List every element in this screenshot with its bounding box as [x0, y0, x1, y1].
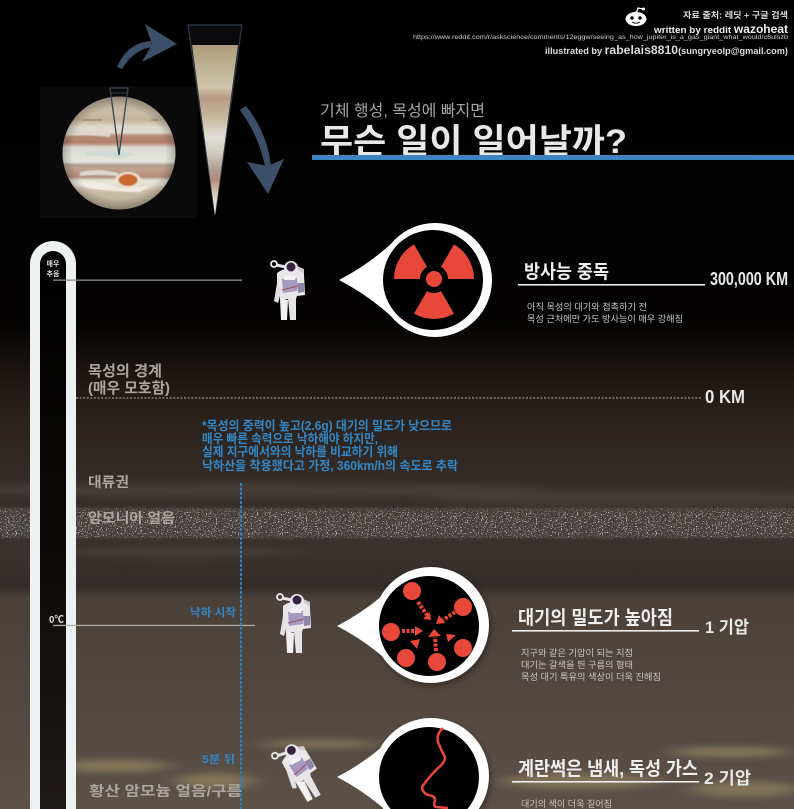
text: smell description: 대기의 색이 더욱 짙어짐 [521, 798, 612, 809]
author line: written by reddit wazoheat [653, 24, 788, 36]
layer labels: (매우 모호함) [88, 380, 170, 397]
heading: density rises: 대기의 밀도가 높아짐 [518, 607, 673, 629]
icon: compressing particles [382, 582, 472, 671]
blue note [202, 418, 458, 473]
pressure: 1 atm: 1 기압 [705, 618, 749, 637]
level line: 300,000 km [53, 280, 242, 281]
credits [413, 8, 788, 57]
astronaut 2 [277, 594, 311, 653]
astronaut 1 [271, 261, 305, 320]
arrow: wedge downward [240, 106, 284, 194]
jupiter photo panel [40, 86, 197, 218]
blue note: 낙하산을 착용했다고 가정, 360km/h의 속도로 추락 [202, 458, 458, 473]
source url: https://www.reddit.com/r/askscience/comments/12eggw/seeing_as_how_jupiter_is_a_gas_giant_what_would/c6ulszb [413, 34, 788, 41]
main title: 무슨 일이 일어날까? [320, 123, 627, 161]
subtitle: 기체 행성, 목성에 빠지면 [320, 102, 485, 120]
bubble: smell [337, 718, 491, 809]
label: ammonia ice: 암모니아 얼음 [88, 510, 175, 526]
jupiter atmosphere wedge [188, 25, 242, 215]
blue note: 매우 빠른 속력으로 낙하해야 하지만, [202, 431, 378, 446]
heading: rotten egg smell: 계란썩은 냄새, 독성 가스 [518, 758, 698, 780]
title underline [312, 155, 794, 160]
distance: 0 km: 0 KM [705, 387, 745, 407]
icon: reddit alien [626, 8, 646, 26]
label: boundary: 목성의 경계 [88, 363, 162, 380]
text: radiation description: 아직 목성의 대기와 접촉하기 전 [527, 301, 647, 312]
source line: 자료 출처: 레딧 + 구글 검색 [683, 10, 788, 20]
level line: 0 km boundary [76, 397, 702, 399]
zero celsius label: 0℃ [49, 615, 64, 626]
title [312, 102, 794, 161]
icon: radiation [394, 244, 474, 319]
label: five minutes later: 5분 뒤 [202, 753, 235, 766]
descent dotted line [240, 483, 242, 809]
layer labels [88, 363, 242, 799]
icon: face profile [422, 728, 448, 808]
blue note: *목성의 중력이 높고(2.6g) 대기의 밀도가 낮으므로 [202, 418, 452, 433]
pressure: 2 atm: 2 기압 [704, 769, 751, 788]
text: density description: 지구와 같은 기압이 되는 지점 [521, 647, 633, 658]
heading: radiation poisoning: 방사능 중독 [524, 261, 609, 283]
thermometer scale: 추움 [47, 270, 60, 278]
text: radiation description: 목성 근처에만 가도 방사능이 매우 강해짐 [527, 313, 683, 324]
text: radiation description [527, 301, 683, 324]
blue note: 실제 지구에서와의 낙하를 비교하기 위해 [202, 444, 398, 459]
label: troposphere: 대류권 [88, 474, 129, 490]
illustrator line: illustrated by rabelais8810(sungryeolp@gmail.com) [545, 43, 788, 57]
bubble: radiation [339, 223, 492, 337]
astronaut 3 [271, 739, 329, 807]
text: density description: 대기는 갈색을 띈 구름의 형태 [521, 660, 633, 670]
label: descent start: 낙하 시작 [190, 606, 236, 619]
arrow: planet to wedge [117, 24, 177, 69]
text: density description: 목성 대기 특유의 색상이 더욱 진해짐 [521, 672, 661, 682]
thermometer scale [30, 241, 76, 809]
level line: 1 atm [53, 625, 255, 626]
label: ammonium sulfide: 황산 암모늄 얼음/구름 [89, 783, 242, 799]
text: density description [521, 647, 661, 682]
very cold label: 매우 [47, 259, 60, 268]
bubble: density [337, 567, 491, 686]
ammonia ice particle band [0, 505, 794, 541]
